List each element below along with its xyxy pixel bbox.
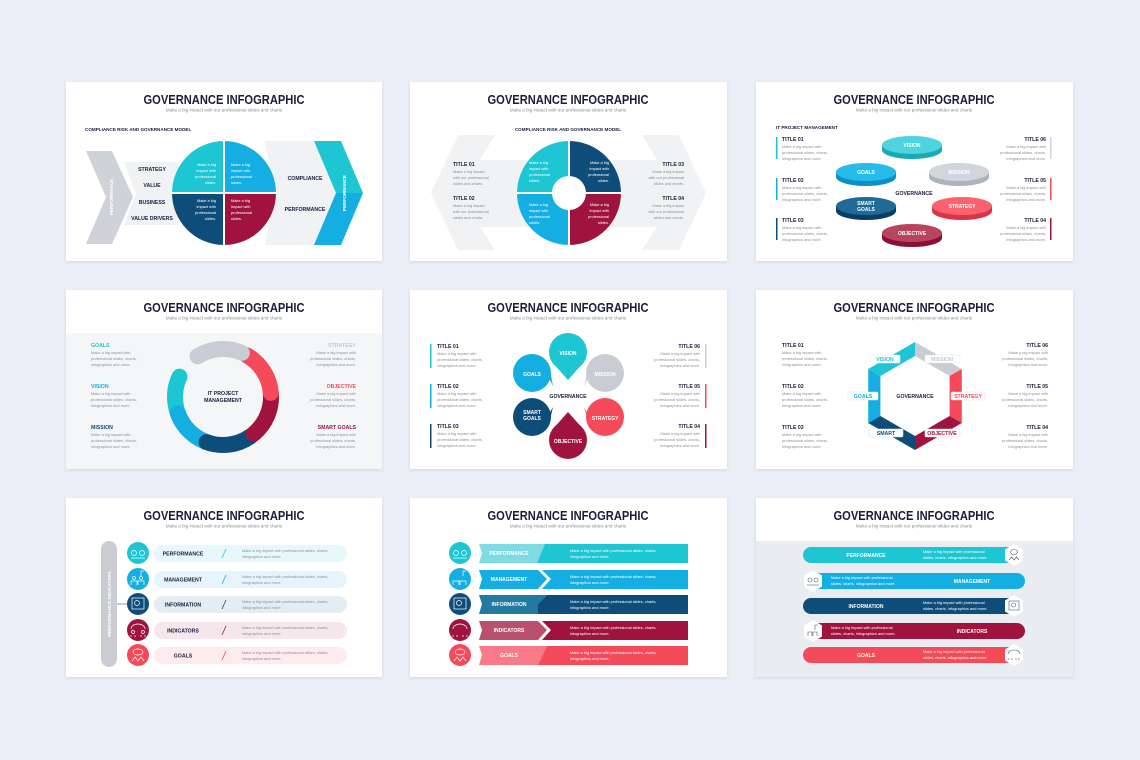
donut: Make a big [529,202,548,207]
right labels: STRATEGY [328,343,357,349]
right light arrow: COMPLIANCE [288,176,323,182]
flower petals: GOVERNANCE [549,394,587,400]
rows: infographics and more. [570,605,610,610]
right titles: TITLE 05 [1024,178,1046,184]
donut: slides. [529,220,540,225]
left titles: TITLE 01 [437,344,459,350]
slide 4: IT project management ring [66,290,382,469]
quadrant circle: Make a big [197,162,216,167]
left titles: professional slides, charts, [782,150,828,155]
rows: Make a big impact with professional slides, charts, [570,650,656,655]
left titles: Make a big impact with [782,350,822,355]
rows: Make a big impact with professional slides, charts, [570,625,656,630]
right arrow: TITLE 03 [662,162,684,168]
rows: Make a big impact with professional [831,575,893,580]
right titles: infographics and more. [1008,403,1048,408]
slide 6: hexagon [756,290,1073,469]
hexagon ring: VISION [876,357,894,363]
right titles: infographics and more. [660,443,700,448]
quadrant circle: impact with [197,204,216,209]
left titles: professional slides, charts, [437,437,483,442]
left labels: Make a big impact with [91,432,131,437]
rows: infographics and more. [570,580,610,585]
right titles: professional slides, charts, [1000,191,1046,196]
left titles: TITLE 01 [782,137,804,143]
right titles: infographics and more. [1008,444,1048,449]
left titles: Make a big impact with [437,431,477,436]
left labels chevron: STRATEGY [138,167,166,173]
rows: MANAGEMENT [164,578,203,584]
flower petals: OBJECTIVE [554,439,583,445]
slide 3: IT project management discs [756,82,1073,261]
donut: professional [529,214,550,219]
rows: GOALS [500,653,519,659]
right titles: Make a big impact with [1006,144,1046,149]
donut [517,141,621,245]
rows: slides, charts, infographics and more. [923,655,987,660]
subtitle: Make a big impact with our professional slides and charts [856,316,973,320]
right titles: infographics and more. [1006,197,1046,202]
quadrant circle: professional [195,210,216,215]
discs: GOVERNANCE [895,191,933,197]
donut: Make a big [590,202,609,207]
left gray chevron: PERFORMANCE [109,179,114,215]
right titles: TITLE 06 [1026,343,1048,349]
title: GOVERNANCE INFOGRAPHIC [144,93,304,107]
right labels: infographics and more. [316,403,356,408]
rows: Make a big impact with professional slides, charts, [570,548,656,553]
rows: PERFORMANCE [163,552,204,558]
rows: Make a big impact with professional slides, charts, [242,574,328,579]
rows: infographics and more. [242,554,282,559]
left titles [430,344,483,448]
rows: infographics and more. [570,554,610,559]
left labels chevron: VALUE [143,183,161,189]
quadrant circle: professional [195,174,216,179]
rows: INDICATORS [957,629,988,635]
rows [803,544,1025,666]
rows: INFORMATION [849,604,884,610]
right arrow: TITLE 04 [662,196,684,202]
left labels chevron [124,162,178,225]
donut: slides. [598,178,609,183]
rows [127,542,347,666]
left titles: infographics and more. [782,444,822,449]
right titles: TITLE 04 [1024,218,1046,224]
left titles: TITLE 03 [782,425,804,431]
right titles: Make a big impact with [1008,391,1048,396]
right labels: OBJECTIVE [327,384,357,390]
discs: STRATEGY [949,204,976,210]
left labels: GOALS [91,343,110,349]
right labels: infographics and more. [316,362,356,367]
left titles: infographics and more. [782,237,822,242]
right titles: professional slides, charts, [1000,150,1046,155]
discs: SMART [857,201,875,207]
subtitle: Make a big impact with our professional slides and charts [166,316,283,320]
donut: slides. [598,220,609,225]
donut: Make a big [529,160,548,165]
slide 1: compliance risk and governance model [66,82,382,261]
rows: Make a big impact with professional [831,625,893,630]
quadrant circle: slides. [231,216,242,221]
right labels [310,343,357,449]
right titles: Make a big impact with [1008,432,1048,437]
left titles: infographics and more. [782,197,822,202]
right labels: professional slides, charts, [310,356,356,361]
rows: INDICATORS [167,628,199,634]
rows: Make a big impact with professional slides, charts, [570,599,656,604]
left titles [782,343,828,449]
left titles: Make a big impact with [437,351,477,356]
rows: GOALS [174,654,193,660]
ring chart [156,330,290,464]
quadrant circle: professional [231,174,252,179]
right blue chevron [314,141,363,245]
left titles: infographics and more. [437,443,477,448]
rows: slides, charts, infographics and more. [923,606,987,611]
quadrant circle: slides. [205,216,216,221]
rows: Make a big impact with professional slides, charts, [242,599,328,604]
left titles: infographics and more. [437,363,477,368]
discs: GOALS [857,170,876,176]
ring chart: IT PROJECT [208,391,239,397]
subtitle: Make a big impact with our professional slides and charts [856,108,973,112]
rows: Make a big impact with professional slides, charts, [242,548,328,553]
title: GOVERNANCE INFOGRAPHIC [144,301,304,315]
right arrow: slides and charts. [654,181,684,186]
right arrow: Make a big impact [652,203,685,208]
rows: infographics and more. [242,631,282,636]
right titles: professional slides, charts, [1000,231,1046,236]
right titles [654,344,706,448]
rows: infographics and more. [242,580,282,585]
right labels: Make a big impact with [316,350,356,355]
discs [836,136,992,247]
left gray chevron [86,151,133,244]
subtitle: Make a big impact with our professional slides and charts [510,108,627,112]
flower petals: MISSION [594,372,616,378]
right arrow: Make a big impact [652,169,685,174]
rows: Make a big impact with professional slides, charts, [242,650,328,655]
right titles: Make a big impact with [1006,185,1046,190]
rows [449,542,688,666]
left titles: TITLE 03 [437,424,459,430]
left arrow: slides and charts. [453,215,483,220]
rows: GOALS [857,653,876,659]
left titles: infographics and more. [782,362,822,367]
quadrant circle: Make a big [231,198,250,203]
rows: MANAGEMENT [491,577,527,583]
right labels: professional slides, charts, [310,438,356,443]
rows: INDICATORS [494,628,525,634]
left labels: infographics and more. [91,403,131,408]
subtitle: Make a big impact with our professional slides and charts [856,524,973,528]
slide 8: chevron bars [410,498,727,677]
right titles: infographics and more. [660,363,700,368]
title: GOVERNANCE INFOGRAPHIC [488,93,648,107]
title: GOVERNANCE INFOGRAPHIC [144,509,304,523]
right titles [1000,137,1052,242]
flower petals: VISION [560,351,577,357]
slide 9: rounded bars with hex icons [756,498,1073,677]
quadrant circle: slides. [231,180,242,185]
left titles: Make a big impact with [782,185,822,190]
right arrow: slides and charts. [654,215,684,220]
quadrant circle: impact with [197,168,216,173]
right titles: Make a big impact with [1006,225,1046,230]
left titles: professional slides, charts, [782,356,828,361]
flower petals: STRATEGY [592,416,619,422]
left titles: infographics and more. [782,403,822,408]
section heading: COMPLIANCE RISK AND GOVERNANCE MODEL [85,127,191,132]
hexagon ring: MISSION [931,357,953,363]
title: GOVERNANCE INFOGRAPHIC [834,93,994,107]
right titles: professional slides, charts, [1002,397,1048,402]
rows: infographics and more. [570,656,610,661]
right titles: infographics and more. [1006,156,1046,161]
hexagon ring: SMART [877,431,896,437]
right titles: TITLE 06 [678,344,700,350]
right titles: Make a big impact with [660,431,700,436]
right labels: SMART GOALS [318,425,357,431]
title: GOVERNANCE INFOGRAPHIC [834,301,994,315]
slide 7: performance indicators pills [66,498,382,677]
left arrow: TITLE 01 [453,162,475,168]
left titles: TITLE 02 [782,384,804,390]
right light arrow: PERFORMANCE [285,207,326,213]
right titles [1002,343,1048,449]
donut: Make a big [590,160,609,165]
quadrant circle: slides. [205,180,216,185]
right titles: TITLE 05 [678,384,700,390]
right titles: Make a big impact with [660,351,700,356]
right light arrow [265,141,340,245]
discs: MISSION [948,170,970,176]
right titles: professional slides, charts, [654,357,700,362]
rows: Make a big impact with professional slides, charts, [242,625,328,630]
right arrow [609,135,706,250]
left titles: TITLE 02 [782,178,804,184]
quadrant circle: professional [231,210,252,215]
left titles: professional slides, charts, [437,397,483,402]
right titles: infographics and more. [1008,362,1048,367]
flower petals: SMART [523,410,541,416]
rows: INFORMATION [492,602,527,608]
right titles: TITLE 05 [1026,384,1048,390]
right titles: TITLE 04 [678,424,700,430]
left arrow: with our professional [453,209,489,214]
right labels: professional slides, charts, [310,397,356,402]
subtitle: Make a big impact with our professional slides and charts [510,316,627,320]
left titles: professional slides, charts, [782,397,828,402]
left titles [776,137,828,242]
left labels: VISION [91,384,109,390]
right titles: professional slides, charts, [1002,438,1048,443]
title: GOVERNANCE INFOGRAPHIC [488,301,648,315]
discs: GOALS [857,207,876,213]
donut: professional [588,172,609,177]
quadrant circle: impact with [231,204,250,209]
right titles: Make a big impact with [1008,350,1048,355]
hexagon ring: OBJECTIVE [927,431,957,437]
left titles: professional slides, charts, [782,231,828,236]
title: GOVERNANCE INFOGRAPHIC [834,509,994,523]
donut: impact with [590,208,609,213]
right titles: professional slides, charts, [654,397,700,402]
flower petals [513,333,624,459]
donut: slides. [529,178,540,183]
flower petals: GOALS [523,372,542,378]
right titles: professional slides, charts, [654,437,700,442]
left labels chevron: VALUE DRIVERS [131,216,173,222]
left arrow: with our professional [453,175,489,180]
left labels: Make a big impact with [91,391,131,396]
subtitle: Make a big impact with our professional slides and charts [166,108,283,112]
right labels: Make a big impact with [316,432,356,437]
title: GOVERNANCE INFOGRAPHIC [488,509,648,523]
left titles: TITLE 03 [782,218,804,224]
rows: INFORMATION [165,602,201,608]
left titles: infographics and more. [782,156,822,161]
rows: infographics and more. [242,605,282,610]
left titles: Make a big impact with [437,391,477,396]
quadrant circle [172,141,276,245]
vertical bar [101,541,127,667]
left labels chevron: BUSINESS [139,200,166,206]
right titles: TITLE 04 [1026,425,1048,431]
slide 5: flower [410,290,727,469]
left titles: TITLE 01 [782,343,804,349]
left titles: professional slides, charts, [782,438,828,443]
left labels: infographics and more. [91,362,131,367]
rows: infographics and more. [570,631,610,636]
right titles: TITLE 06 [1024,137,1046,143]
donut: impact with [529,166,548,171]
left titles: Make a big impact with [782,144,822,149]
right labels: infographics and more. [316,444,356,449]
left arrow: slides and charts. [453,181,483,186]
left labels [91,343,137,449]
left titles: professional slides, charts, [437,357,483,362]
left arrow: Make a big impact [453,203,485,208]
right arrow: with our professional [648,209,684,214]
quadrant circle: Make a big [197,198,216,203]
hexagon ring [848,342,985,450]
left titles: Make a big impact with [782,391,822,396]
rows: PERFORMANCE [846,553,886,559]
donut: professional [588,214,609,219]
hexagon ring: STRATEGY [954,394,982,400]
quadrant circle: impact with [231,168,250,173]
right titles: professional slides, charts, [1002,356,1048,361]
flower petals: GOALS [523,416,542,422]
rows: MANAGEMENT [954,579,990,585]
left labels: Make a big impact with [91,350,131,355]
left labels: professional slides, charts, [91,438,137,443]
hexagon ring: GOVERNANCE [896,394,934,400]
left arrow: Make a big impact [453,169,485,174]
left arrow [431,135,528,250]
rows: Make a big impact with professional [923,600,985,605]
section heading: IT PROJECT MANAGEMENT [776,125,838,130]
ring chart: MANAGEMENT [204,398,243,404]
left titles: Make a big impact with [782,225,822,230]
rows: slides, charts, infographics and more. [831,631,895,636]
quadrant circle: Make a big [231,162,250,167]
right labels: Make a big impact with [316,391,356,396]
left labels: MISSION [91,425,113,431]
vertical bar: PERFORMANCE INDICATORS [107,571,112,637]
rows: Make a big impact with professional slides, charts, [570,574,656,579]
rows: infographics and more. [242,656,282,661]
donut: impact with [590,166,609,171]
left titles: TITLE 02 [437,384,459,390]
slide 2: donut with arrows [410,82,727,261]
left arrow: TITLE 02 [453,196,475,202]
discs: OBJECTIVE [898,231,927,237]
rows: slides, charts, infographics and more. [831,581,895,586]
subtitle: Make a big impact with our professional slides and charts [510,524,627,528]
rows: slides, charts, infographics and more. [923,555,987,560]
rows: PERFORMANCE [489,551,529,557]
right titles: infographics and more. [660,403,700,408]
section heading: COMPLIANCE RISK AND GOVERNANCE MODEL [515,127,621,132]
discs: VISION [904,143,921,149]
subtitle: Make a big impact with our professional slides and charts [166,524,283,528]
left labels: professional slides, charts, [91,356,137,361]
donut: impact with [529,208,548,213]
rows: Make a big impact with professional [923,649,985,654]
donut: professional [529,172,550,177]
left titles: infographics and more. [437,403,477,408]
right arrow: with our professional [648,175,684,180]
rows: Make a big impact with professional [923,549,985,554]
left titles: professional slides, charts, [782,191,828,196]
right titles: Make a big impact with [660,391,700,396]
left labels: professional slides, charts, [91,397,137,402]
left labels: infographics and more. [91,444,131,449]
left titles: Make a big impact with [782,432,822,437]
hexagon ring: GOALS [854,394,873,400]
right titles: infographics and more. [1006,237,1046,242]
right blue chevron: PERFORMANCE [342,175,347,211]
